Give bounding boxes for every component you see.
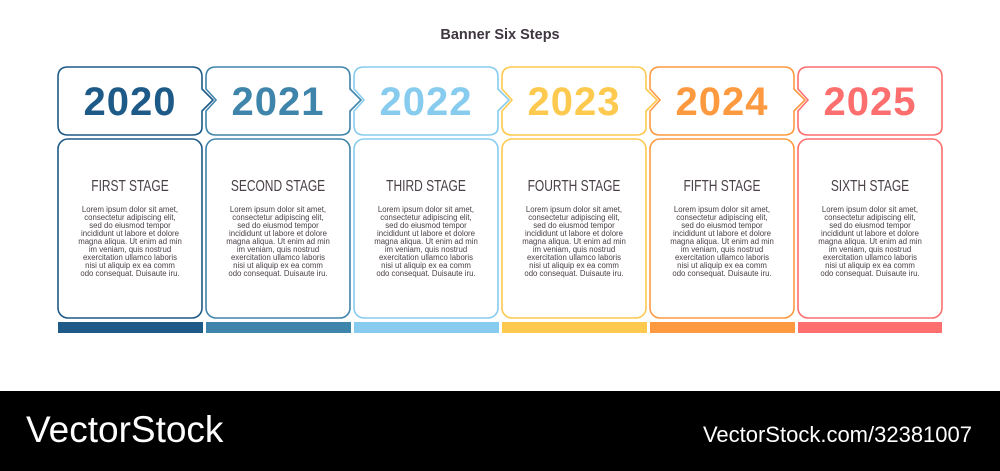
step 4: exercitation ullamco laboris (527, 253, 621, 262)
step 4: incididunt ut labore et dolore (525, 229, 623, 238)
step 3: odo consequat. Duisaute iru. (376, 269, 476, 278)
step 1: sed do eiusmod tempor (89, 221, 171, 230)
step 6: consectetur adipiscing elit, (824, 213, 916, 222)
step 2: exercitation ullamco laboris (231, 253, 325, 262)
title: Banner Six Steps (440, 27, 560, 43)
step 6: Lorem ipsum dolor sit amet, (822, 205, 918, 214)
step 2: magna aliqua. Ut enim ad min (226, 237, 330, 246)
step 5: nisi ut aliquip ex ea comm (677, 261, 767, 270)
step 3: consectetur adipiscing elit, (380, 213, 472, 222)
step 1: incididunt ut labore et dolore (81, 229, 179, 238)
step 3: im veniam, quis nostrud (385, 245, 467, 254)
step 3: 2022 (380, 80, 472, 124)
step 6: magna aliqua. Ut enim ad min (818, 237, 922, 246)
step 6: 2025 (824, 80, 916, 124)
step 5: odo consequat. Duisaute iru. (672, 269, 772, 278)
step 2 (206, 67, 361, 333)
step 4: magna aliqua. Ut enim ad min (522, 237, 626, 246)
step 1 (58, 67, 213, 333)
step 1: odo consequat. Duisaute iru. (80, 269, 180, 278)
footer band: VectorStock.com/32381007 (703, 422, 972, 447)
step 2: nisi ut aliquip ex ea comm (233, 261, 323, 270)
step 3: incididunt ut labore et dolore (377, 229, 475, 238)
step 3: sed do eiusmod tempor (385, 221, 467, 230)
step 2: SECOND STAGE (231, 176, 325, 194)
step 2: incididunt ut labore et dolore (229, 229, 327, 238)
step 1: magna aliqua. Ut enim ad min (78, 237, 182, 246)
step 1: FIRST STAGE (91, 176, 169, 194)
step 6: odo consequat. Duisaute iru. (820, 269, 920, 278)
step 6: nisi ut aliquip ex ea comm (825, 261, 915, 270)
step 1: consectetur adipiscing elit, (84, 213, 176, 222)
step 5: FIFTH STAGE (683, 176, 761, 194)
step 2: 2021 (232, 80, 324, 124)
step 4 (502, 67, 657, 333)
footer band: VectorStock (26, 409, 224, 450)
step 4: odo consequat. Duisaute iru. (524, 269, 624, 278)
step 2: im veniam, quis nostrud (237, 245, 319, 254)
step 1: exercitation ullamco laboris (83, 253, 177, 262)
step 1: nisi ut aliquip ex ea comm (85, 261, 175, 270)
step 2: consectetur adipiscing elit, (232, 213, 324, 222)
step 3 (354, 67, 509, 333)
step 5: consectetur adipiscing elit, (676, 213, 768, 222)
step 3: exercitation ullamco laboris (379, 253, 473, 262)
step 5: exercitation ullamco laboris (675, 253, 769, 262)
step 5: Lorem ipsum dolor sit amet, (674, 205, 770, 214)
step 3: magna aliqua. Ut enim ad min (374, 237, 478, 246)
step 5 (650, 67, 805, 333)
step 4: 2023 (528, 80, 620, 124)
step 2: Lorem ipsum dolor sit amet, (230, 205, 326, 214)
step 1: im veniam, quis nostrud (89, 245, 171, 254)
step 2: odo consequat. Duisaute iru. (228, 269, 328, 278)
step 6: im veniam, quis nostrud (829, 245, 911, 254)
step 5: incididunt ut labore et dolore (673, 229, 771, 238)
step 5: magna aliqua. Ut enim ad min (670, 237, 774, 246)
step 4: consectetur adipiscing elit, (528, 213, 620, 222)
step 1: Lorem ipsum dolor sit amet, (82, 205, 178, 214)
step 4: FOURTH STAGE (528, 176, 620, 194)
step 5: 2024 (676, 80, 768, 124)
step 2: sed do eiusmod tempor (237, 221, 319, 230)
step 3: Lorem ipsum dolor sit amet, (378, 205, 474, 214)
step 5: sed do eiusmod tempor (681, 221, 763, 230)
step 4: Lorem ipsum dolor sit amet, (526, 205, 622, 214)
footer band (0, 391, 1000, 471)
step 4: nisi ut aliquip ex ea comm (529, 261, 619, 270)
step 4: sed do eiusmod tempor (533, 221, 615, 230)
step 4: im veniam, quis nostrud (533, 245, 615, 254)
step 6: SIXTH STAGE (831, 176, 909, 194)
step 6: incididunt ut labore et dolore (821, 229, 919, 238)
step 3: nisi ut aliquip ex ea comm (381, 261, 471, 270)
step 6 (798, 67, 942, 333)
step 1: 2020 (84, 80, 176, 124)
step 5: im veniam, quis nostrud (681, 245, 763, 254)
step 6: sed do eiusmod tempor (829, 221, 911, 230)
step 3: THIRD STAGE (386, 176, 466, 194)
step 6: exercitation ullamco laboris (823, 253, 917, 262)
